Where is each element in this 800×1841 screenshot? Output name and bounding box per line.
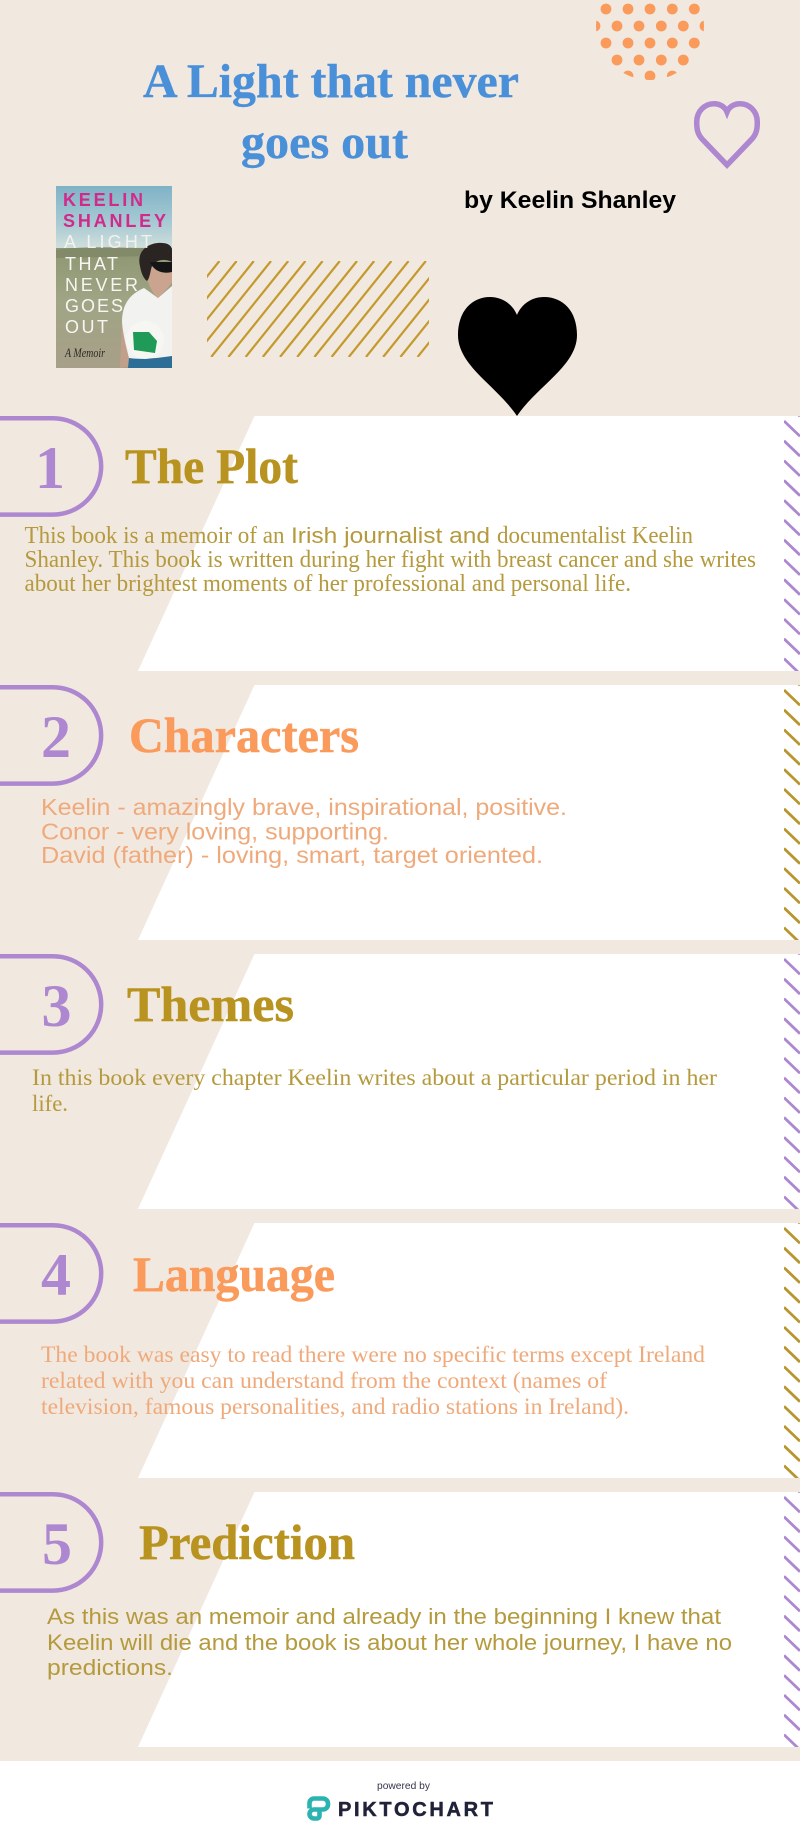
panel 2 body text (41, 794, 567, 868)
title: goes out (241, 116, 408, 169)
panel 5 number badge (0, 1494, 101, 1591)
panel 1 striped edge (784, 401, 800, 674)
panel 4 white background (138, 1223, 800, 1478)
book cover: A LIGHT (64, 232, 152, 252)
book cover: GOES (65, 296, 123, 316)
panel 1 body text (24, 523, 756, 597)
panel 4 body text (41, 1342, 706, 1419)
panel 1: the plot (0, 401, 800, 674)
panel 5 striped edge (784, 1477, 800, 1750)
panel 2 striped edge (784, 670, 800, 943)
panel 3 body text: In this book every chapter Keelin writes about a particular period in her (32, 1065, 717, 1090)
panel 2 body text: Conor - very loving, supporting. (41, 818, 389, 844)
panel 1 number badge (0, 418, 101, 515)
piktochart wordmark: PIKTOCHART (338, 1799, 493, 1821)
panel 5 body text: Keelin will die and the book is about her whole journey, I have no (47, 1630, 732, 1655)
book cover: OUT (65, 317, 108, 337)
panel 3 striped edge (784, 939, 800, 1212)
panel 3 number badge: 3 (42, 973, 72, 1039)
panel 4 number badge (0, 1225, 101, 1322)
book cover: SHANLEY (63, 211, 166, 231)
panel 3 body text (32, 1065, 717, 1116)
panel 1 white background (138, 416, 800, 671)
panel 4 number badge: 4 (41, 1242, 71, 1308)
panel 3 number badge (0, 956, 101, 1053)
footer (0, 1761, 800, 1841)
panel 1 body text: documentalist Keelin (497, 523, 693, 549)
title: A Light that never (143, 55, 519, 108)
footer white band (0, 1761, 800, 1841)
icon: orange dotted circle (596, 4, 704, 80)
panel 5 body text (47, 1604, 732, 1680)
panel 2: characters (0, 670, 800, 943)
icon: black heart (458, 297, 577, 416)
panel 1 heading: The Plot (125, 438, 298, 494)
panel 5 heading: Prediction (139, 1514, 355, 1570)
panel 5 body text: As this was an memoir and already in the beginning I knew that (47, 1604, 721, 1629)
panel 1 body text: Shanley. This book is written during her fight with breast cancer and she writes (24, 547, 756, 573)
panel 5 white background (138, 1492, 800, 1747)
icon: piktochart logo mark (310, 1798, 328, 1818)
panel 5 number badge: 5 (42, 1511, 72, 1577)
book cover: NEVER (65, 275, 138, 295)
panel 2 number badge: 2 (41, 704, 71, 770)
panel 1 number badge: 1 (35, 435, 65, 501)
panel 4 body text: television, famous personalities, and radio stations in Ireland). (41, 1394, 629, 1419)
decorative gold striped rectangle (207, 261, 429, 357)
panel 3 heading: Themes (127, 976, 294, 1032)
panel 2 number badge (0, 687, 101, 784)
book cover: THAT (65, 254, 118, 274)
panel 2 heading: Characters (129, 707, 359, 763)
panel 4 body text: related with you can understand from the context (names of (41, 1368, 607, 1393)
book cover: KEELIN (63, 190, 143, 210)
author byline: by Keelin Shanley (464, 187, 677, 214)
panel 2 body text: Keelin - amazingly brave, inspirational, positive. (41, 794, 567, 820)
book cover: A Memoir (64, 345, 106, 360)
panel 1 body text: about her brightest moments of her professional and personal life. (24, 571, 631, 597)
panel 5: prediction (0, 1477, 800, 1750)
panel 3 body text: life. (32, 1091, 68, 1116)
panel 5 body text: predictions. (47, 1655, 173, 1680)
panel 4 striped edge (784, 1208, 800, 1481)
book cover (56, 186, 172, 368)
panel 3 white background (138, 954, 800, 1209)
panel 4 heading: Language (133, 1246, 335, 1302)
powered by label: powered by (377, 1780, 431, 1792)
icon: purple outline heart (697, 104, 757, 165)
panel 1 body text: Irish journalist and (291, 523, 490, 548)
panel 1 body text: This book is a memoir of an (24, 523, 284, 549)
panel 4 body text: The book was easy to read there were no specific terms except Ireland (41, 1342, 706, 1367)
panel 3: themes (0, 939, 800, 1212)
panel 2 body text: David (father) - loving, smart, target oriented. (41, 842, 543, 868)
panel 4: language (0, 1208, 800, 1481)
panel 2 white background (138, 685, 800, 940)
title (143, 55, 519, 169)
